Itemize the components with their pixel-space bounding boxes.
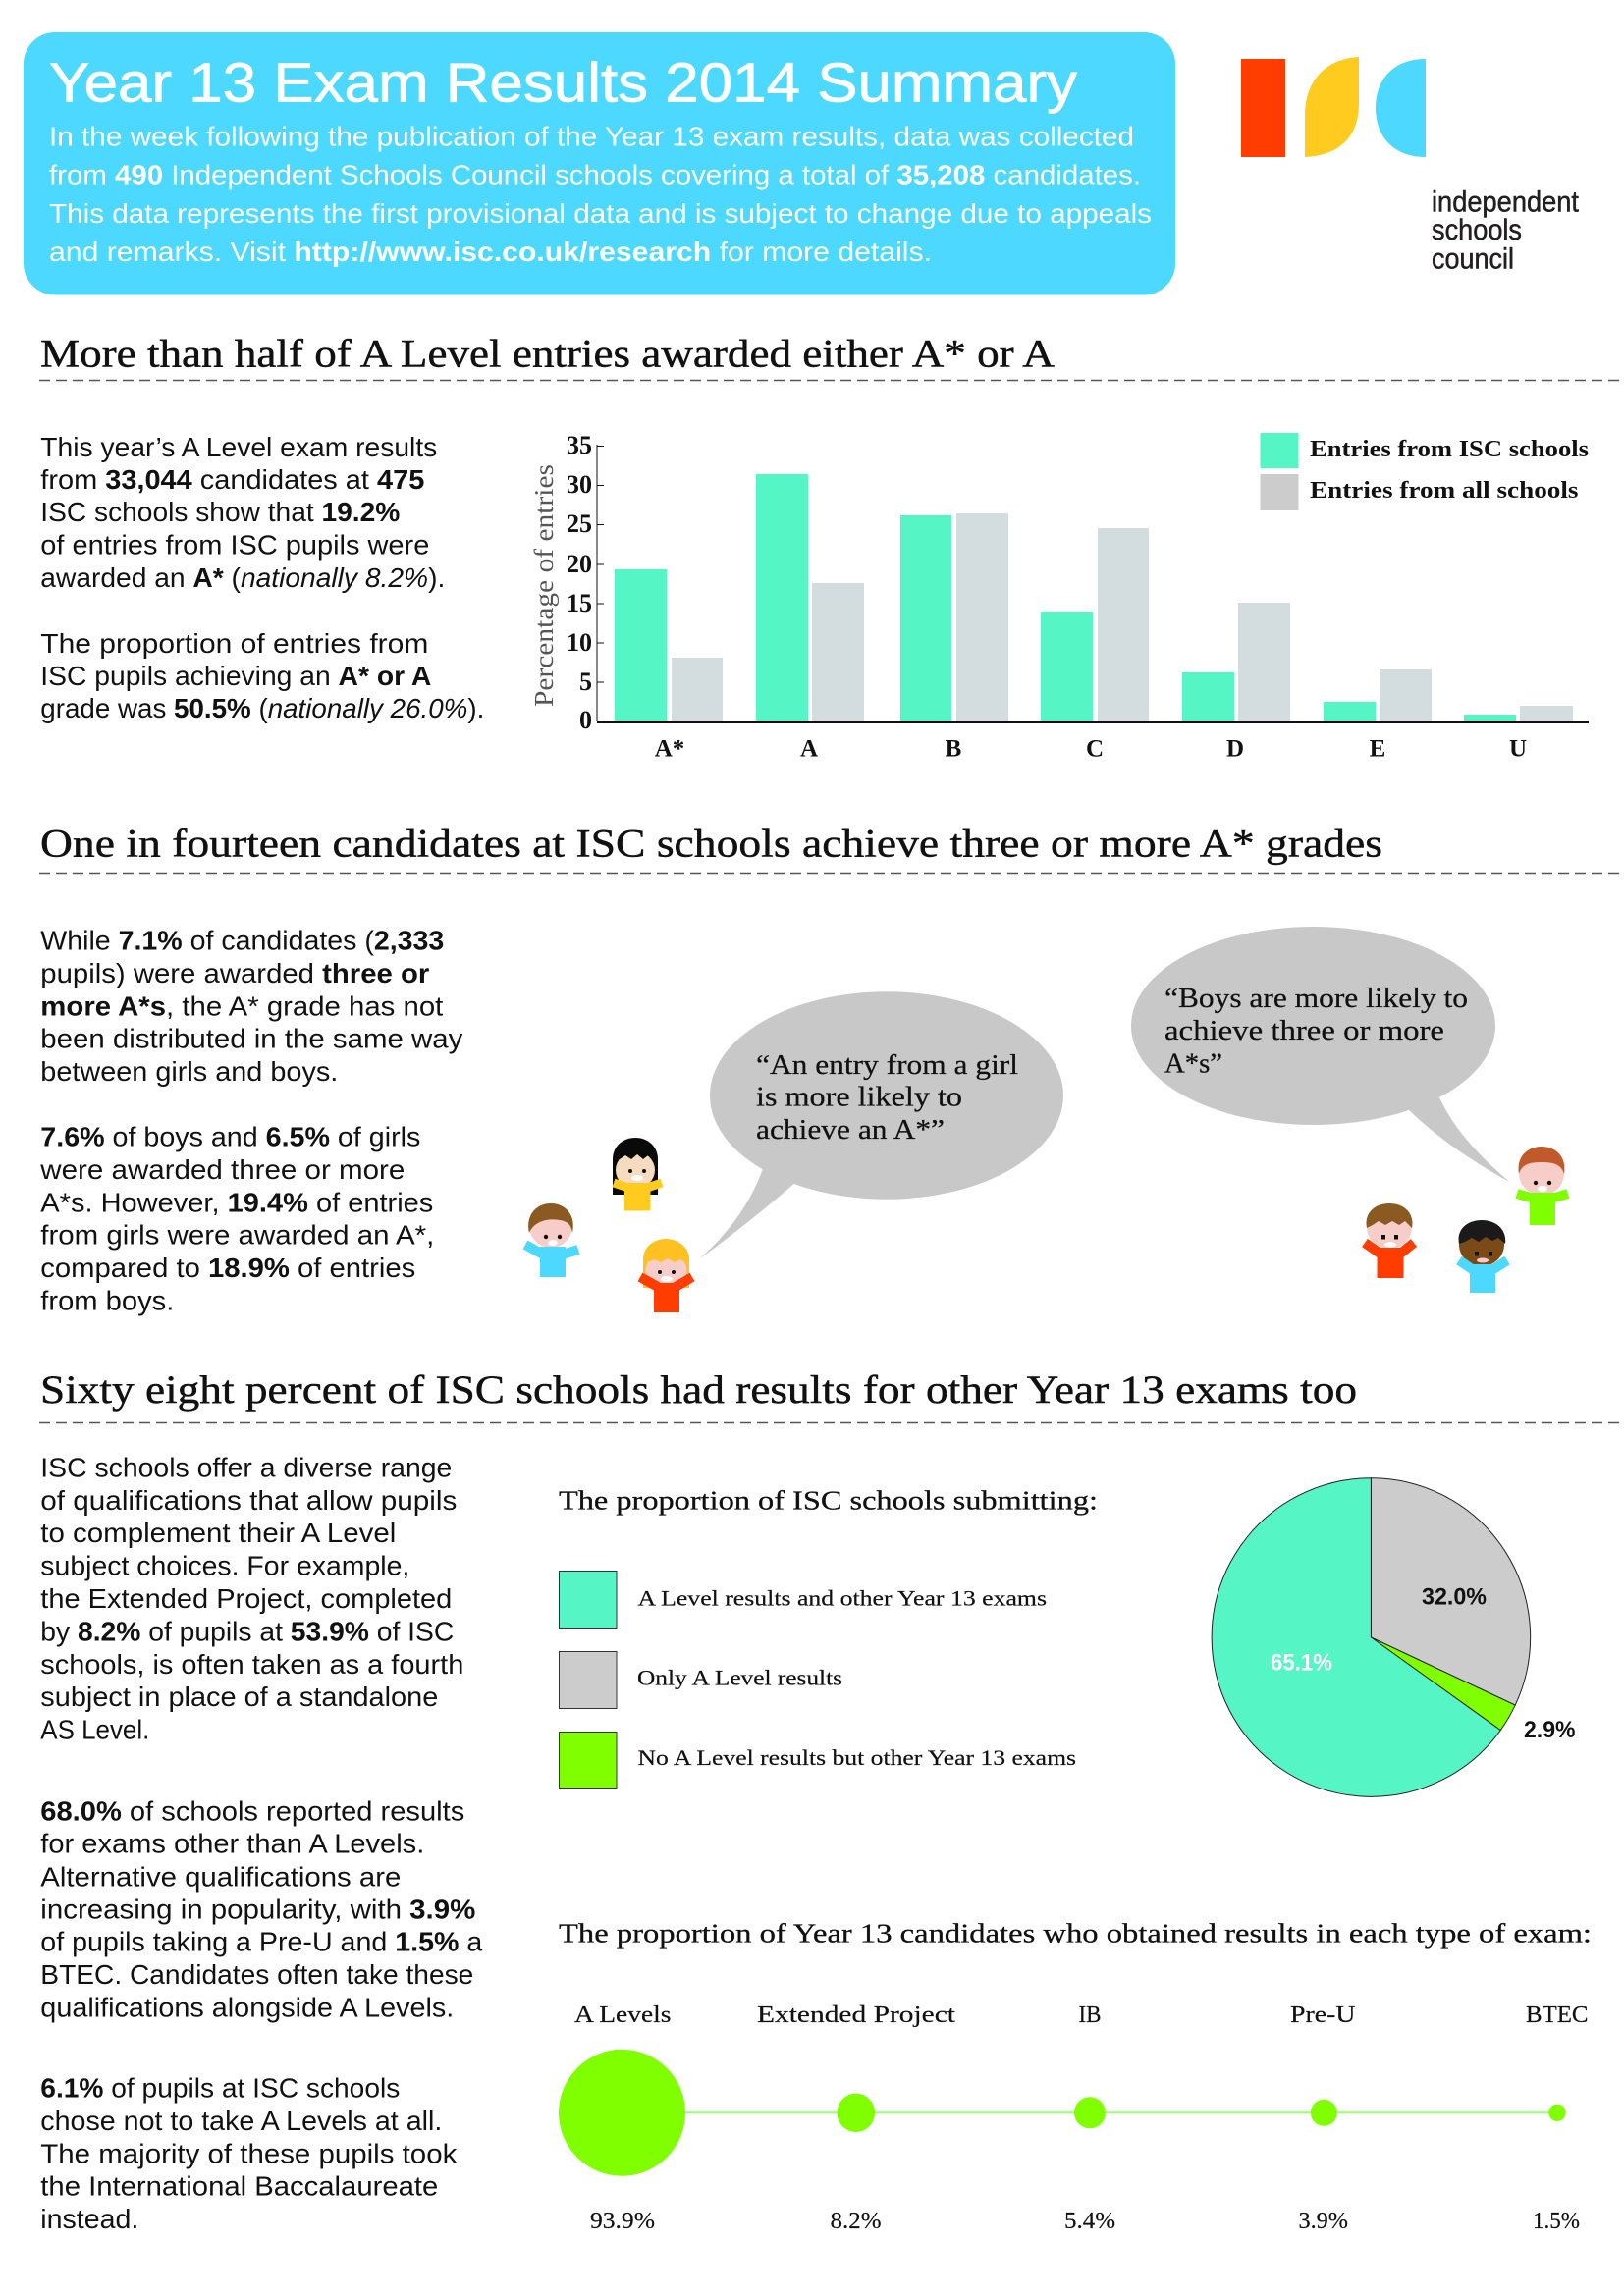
banner intro text: from 490 Independent Schools Council schools covering a total of 35,208 candidates. [49,159,1141,190]
text block: three or more A* grades [39,926,462,1315]
text block: other qualifications: qualifications alongside A Levels. [40,1992,454,2022]
legend: pie chart: No A Level results but other Year 13 exams [638,1745,1076,1770]
legend: pie chart: Only A Level results [637,1665,842,1690]
text block: other qualifications: instead. [40,2204,138,2234]
icon: boy in red shirt [1365,1203,1414,1278]
text block: other qualifications: BTEC. Candidates often take these [40,1959,473,1990]
text block: other qualifications [40,1453,483,2234]
text block: other qualifications: to complement their A Level [40,1518,396,1548]
text block: three or more A* grades: pupils) were awarded three or [40,958,429,988]
bars: ISC schools [615,474,1516,721]
x axis labels: U [1509,736,1527,762]
text block: three or more A* grades: between girls and boys. [40,1056,338,1087]
y axis labels: 25 [567,509,592,538]
legend: pie chart: A Level results and other Year 13 exams [638,1586,1047,1610]
text block: other qualifications: 68.0% of schools reported results [40,1795,464,1826]
x axis labels: D [1226,736,1244,762]
bubble values: 3.9% [1298,2209,1348,2234]
text block: other qualifications: chose not to take A Levels at all. [40,2106,442,2136]
pie chart: schools submitting: 32.0% [1422,1584,1487,1610]
bubble values [590,2209,1580,2234]
text block: other qualifications: ISC schools offer a diverse range [40,1453,452,1482]
bubbles [559,2050,1566,2176]
icon: boy in green shirt [1517,1147,1568,1225]
text block: three or more A* grades: from boys. [40,1285,174,1315]
chart title: exam types: The proportion of Year 13 candidates who obtained results in each type of exam: [559,1918,1592,1948]
bubble values: 1.5% [1533,2209,1580,2234]
text block: other qualifications: subject choices. For example, [40,1551,409,1581]
text block: three or more A* grades: more A*s, the A* grade has not [40,990,444,1021]
legend: Entries from all schools [1310,478,1579,504]
text block: A Level results: awarded an A* (nationally 8.2%). [40,562,445,593]
text block: other qualifications: Alternative qualifications are [40,1861,401,1892]
bubble values: 8.2% [831,2209,882,2234]
text block: A Level results: ISC pupils achieving an A* or A [40,661,431,691]
x axis labels: A [800,736,818,762]
text block: three or more A* grades: A*s. However, 19.4% of entries [40,1187,433,1217]
text block: three or more A* grades: 7.6% of boys and 6.5% of girls [40,1122,420,1152]
bubble labels [574,2002,1589,2028]
icon: girl in red shirt [640,1239,692,1312]
bubble labels: Extended Project [757,2002,955,2028]
logo: independent schools council [1241,57,1580,275]
text block: other qualifications: 6.1% of pupils at ISC schools [40,2073,400,2104]
text block: three or more A* grades: compared to 18.9% of entries [40,1253,415,1283]
x axis labels: A* [655,736,684,762]
text block: three or more A* grades: While 7.1% of candidates (2,333 [40,926,444,956]
banner intro text: This data represents the first provisional data and is subject to change due to appeals [49,198,1152,229]
text block: other qualifications: increasing in popularity, with 3.9% [40,1895,475,1925]
text block: other qualifications: the International Baccalaureate [40,2171,438,2202]
bars: all schools [672,513,1573,721]
x axis labels: C [1086,736,1104,762]
text block: other qualifications: by 8.2% of pupils at 53.9% of ISC [40,1616,454,1647]
callout: girls speech bubble [699,991,1063,1259]
text block: A Level results: This year’s A Level exam results [40,432,437,462]
y axis labels: 0 [579,706,592,734]
text block: A Level results [40,432,484,723]
legend: pie chart [560,1571,1076,1789]
x axis labels: E [1370,736,1385,762]
axes [597,445,1589,722]
callout: boys speech bubble [1131,927,1510,1182]
y axis labels: 15 [567,589,592,617]
chart title: schools submitting: The proportion of ISC schools submitting: [559,1484,1098,1516]
text block: other qualifications: The majority of these pupils took [40,2138,458,2168]
banner intro text: and remarks. Visit http://www.isc.co.uk/research for more details. [49,237,932,267]
pie chart: schools submitting: 2.9% [1524,1717,1575,1743]
bubble values: 5.4% [1064,2209,1115,2234]
icon: girl in yellow shirt [613,1138,662,1211]
bar chart: percentage of entries by grade [529,431,1589,762]
bubble chart: exam types [559,2002,1589,2234]
text block: A Level results: from 33,044 candidates at 475 [40,464,424,495]
callout: boys speech bubble: achieve three or more [1164,1015,1444,1046]
banner intro text [49,121,1152,267]
text block: A Level results: of entries from ISC pupils were [40,530,429,561]
y axis labels: 35 [567,431,592,459]
heading: section 3: Sixty eight percent of ISC schools had results for other Year 13 exams too [40,1367,1357,1412]
x axis labels [655,736,1527,762]
icon: boy in blue shirt [525,1203,578,1277]
text block: other qualifications: for exams other than A Levels. [40,1828,424,1859]
text block: other qualifications: the Extended Project, completed [40,1583,452,1614]
y axis title: Percentage of entries [529,464,559,707]
bubble values: 93.9% [590,2209,655,2234]
logo: independent schools council: independent [1432,187,1580,218]
callout: boys speech bubble: A*s” [1164,1048,1222,1080]
banner intro text: In the week following the publication of the Year 13 exam results, data was collected [49,121,1134,151]
bubble labels: Pre-U [1290,2002,1355,2028]
text block: other qualifications: subject in place of a standalone [40,1682,438,1712]
y axis labels: 20 [567,550,592,578]
y axis labels: 30 [567,470,592,499]
logo: independent schools council: council [1432,243,1514,275]
text block: other qualifications: of qualifications that allow pupils [40,1485,457,1516]
text block: three or more A* grades: been distributed in the same way [40,1024,462,1054]
callout: girls speech bubble: “An entry from a girl [756,1049,1018,1081]
y axis labels [567,431,592,734]
heading: section 1: More than half of A Level entries awarded either A* or A [40,332,1055,375]
text block: A Level results: grade was 50.5% (nationally 26.0%). [40,693,484,723]
x axis labels: B [946,736,961,762]
heading: section 2: One in fourteen candidates at ISC schools achieve three or more A* grades [40,821,1382,866]
text block: A Level results: The proportion of entries from [40,628,428,659]
pie chart: schools submitting: 65.1% [1271,1649,1332,1677]
text block: other qualifications: schools, is often taken as a fourth [40,1649,463,1680]
pie chart: schools submitting [1212,1478,1575,1796]
bubble labels: A Levels [574,2002,672,2028]
text block: other qualifications: AS Level. [40,1714,149,1745]
title: Year 13 Exam Results 2014 Summary [49,51,1078,114]
callout: girls speech bubble: is more likely to [756,1082,962,1113]
callout: girls speech bubble: achieve an A*” [756,1114,945,1146]
bubble labels: BTEC [1526,2002,1589,2028]
legend [1261,433,1589,510]
legend: Entries from ISC schools [1310,437,1589,462]
icon: boy in blue shirt with dark skin [1459,1220,1507,1293]
panel: header banner [24,32,1175,294]
logo: independent schools council: schools [1432,214,1522,246]
text block: three or more A* grades: from girls were awarded an A*, [40,1220,434,1251]
text block: other qualifications: of pupils taking a Pre-U and 1.5% a [40,1927,483,1957]
callout: boys speech bubble: “Boys are more likely to [1164,983,1468,1014]
text block: three or more A* grades: were awarded three or more [39,1154,405,1185]
y axis labels: 10 [567,628,592,657]
text block: A Level results: ISC schools show that 19.2% [40,497,400,527]
y axis labels: 5 [579,667,592,696]
bubble labels: IB [1078,2002,1102,2028]
